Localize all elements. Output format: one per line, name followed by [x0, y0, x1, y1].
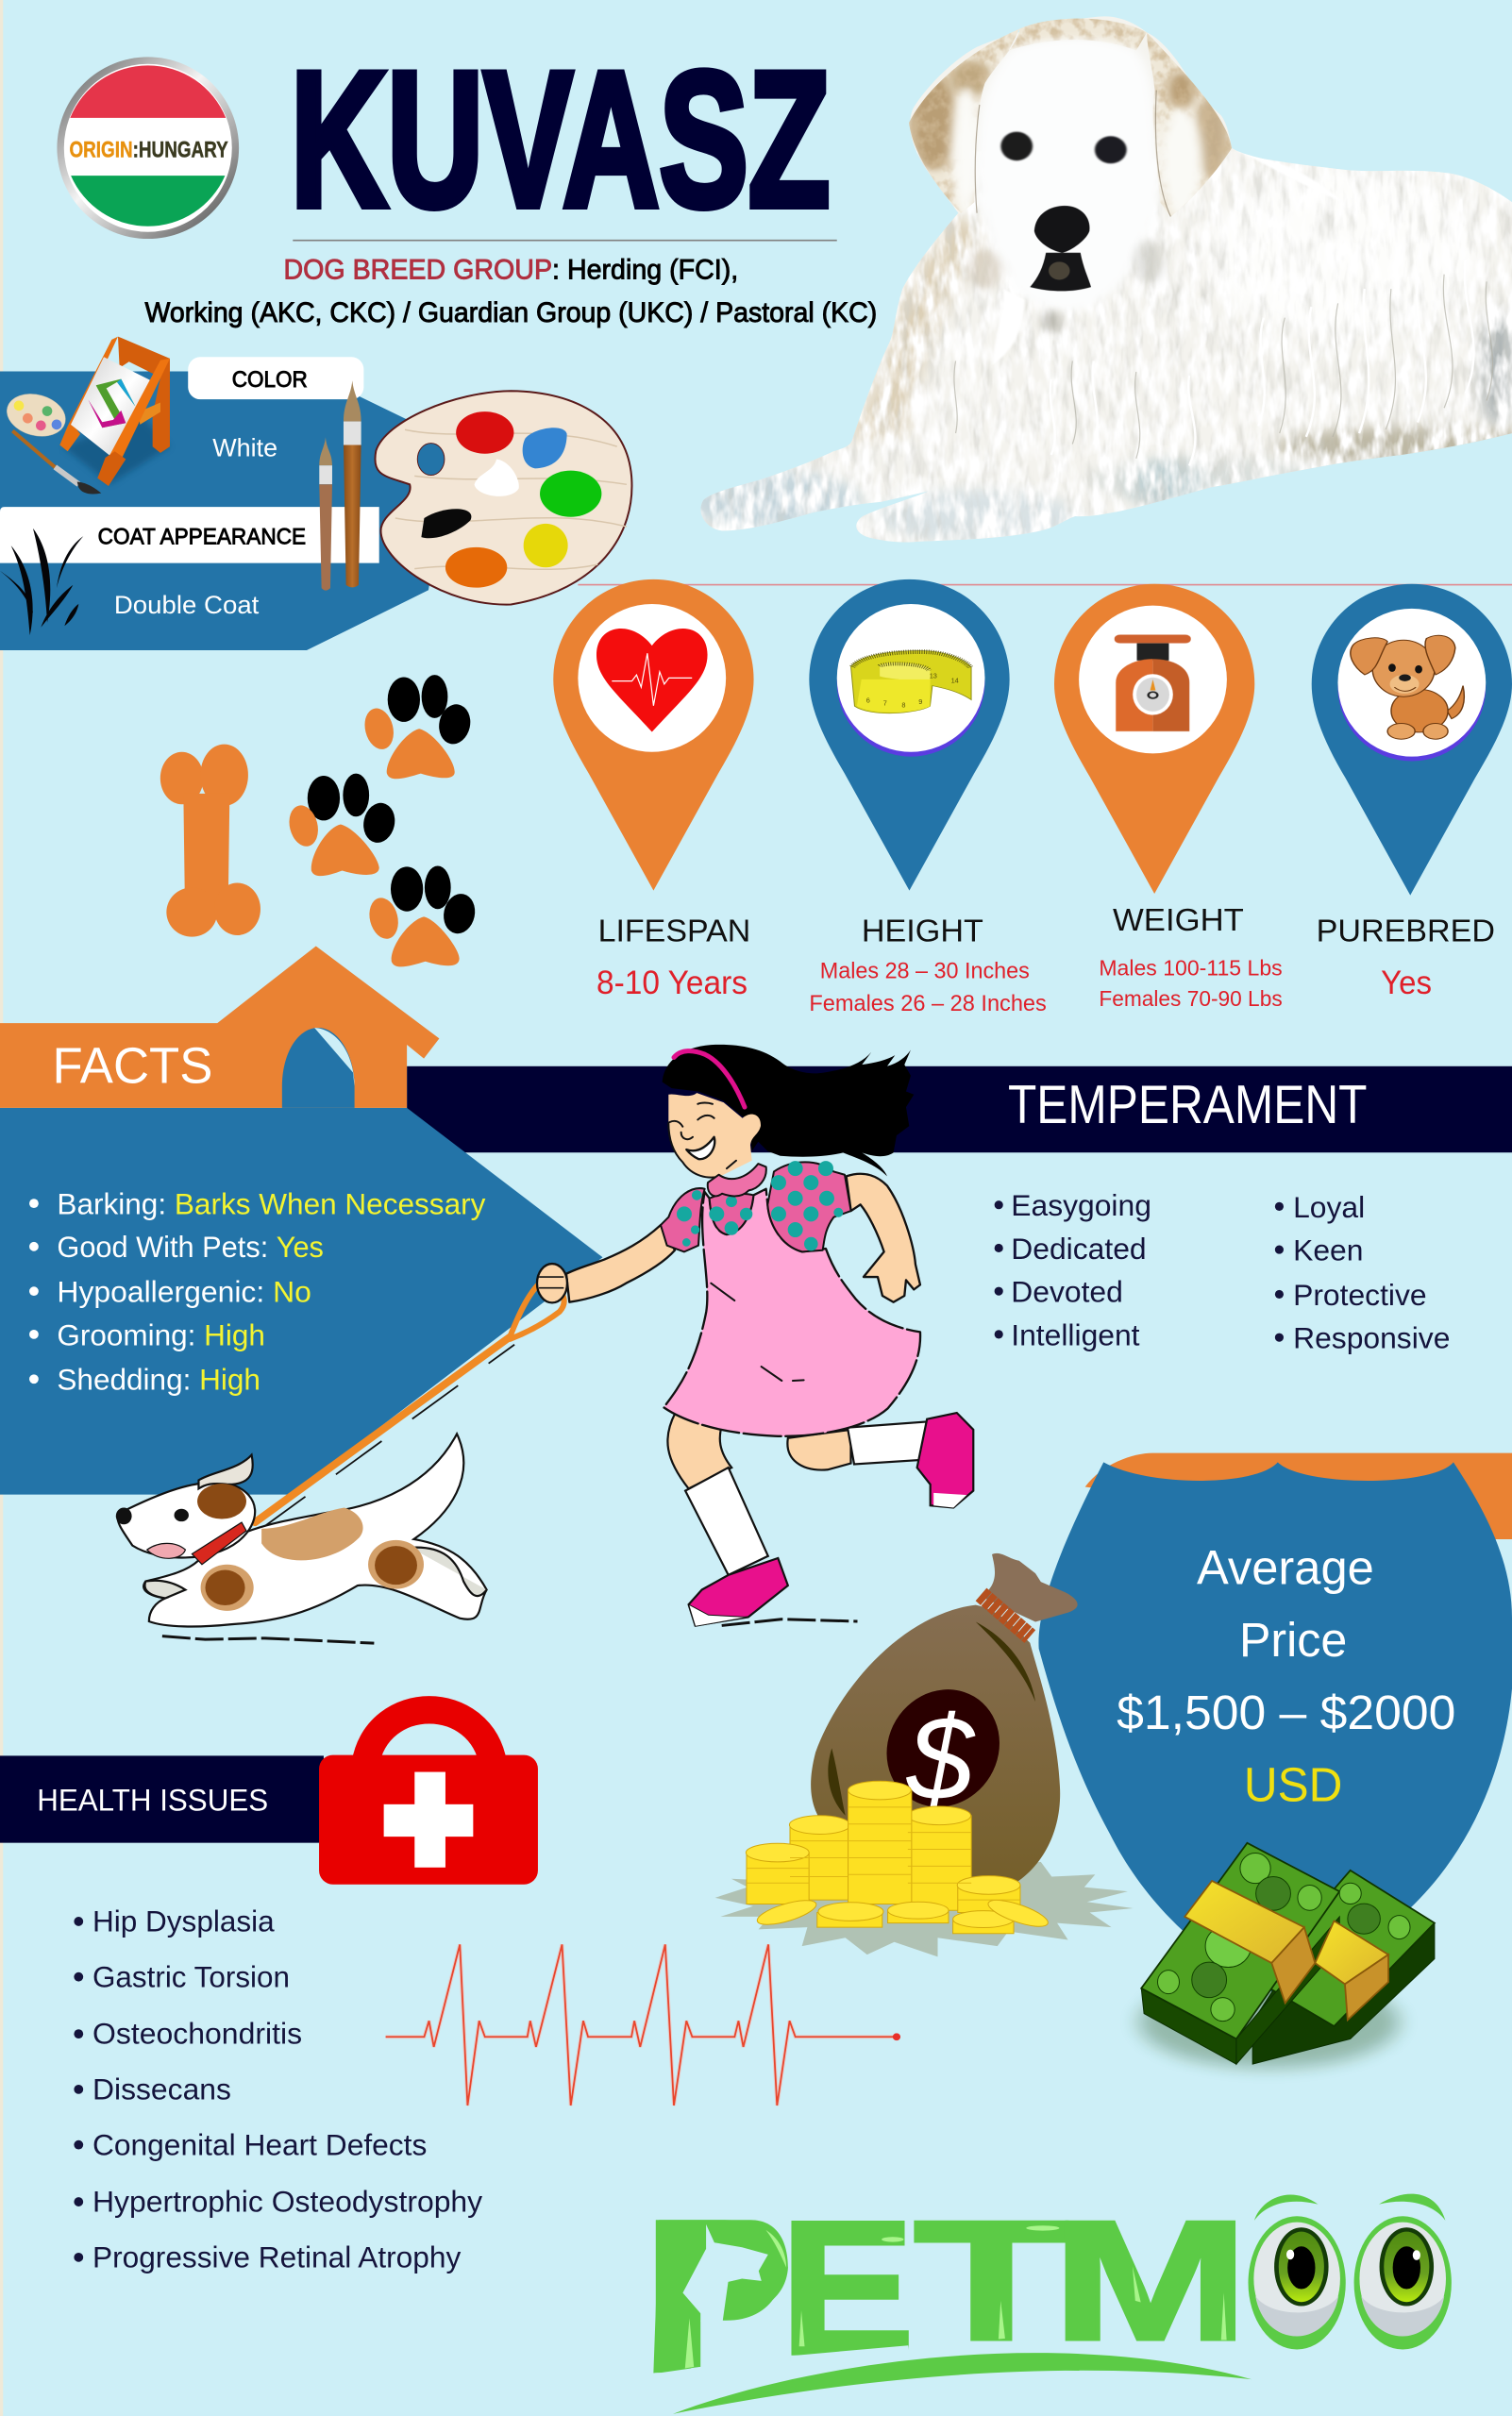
value: height: Males 28 – 30 Inches: [820, 960, 1030, 984]
text block: dog breed group: [145, 255, 877, 328]
icon: tape measure: 7: [883, 699, 887, 708]
dress: [664, 1189, 920, 1436]
value: weight: [1099, 955, 1283, 1011]
girl upper body: [537, 1045, 920, 1436]
icon: first aid kit: [319, 1710, 538, 1885]
logo letters: M: [1051, 2186, 1249, 2376]
logo shapes: [653, 2194, 1452, 2414]
label: weight: WEIGHT: [1113, 903, 1244, 938]
icon: grass: [0, 528, 83, 635]
text block: dog breed group: Working (AKC, CKC) / Guardian Group (UKC) / Pastoral (KC): [145, 297, 877, 328]
text block: facts list: [29, 1187, 485, 1397]
hair: [663, 1045, 914, 1176]
paw 1: [361, 675, 474, 779]
paw 2: [285, 774, 398, 876]
icon: tape measure: 6: [866, 696, 870, 704]
tag: coat appearance: COAT APPEARANCE: [98, 524, 306, 549]
text block: temperament list: Protective: [1293, 1278, 1427, 1312]
icon: tape measure: 13: [930, 671, 937, 680]
collar: [708, 1164, 766, 1196]
label: height: HEIGHT: [862, 914, 983, 949]
label: purebred: PUREBRED: [1317, 914, 1495, 949]
icon: tape measure: 14: [951, 676, 959, 684]
pin: weight: [1054, 584, 1254, 894]
burst: [715, 1862, 1134, 1956]
badge: origin Hungary flag: ORIGIN:HUNGARY: [69, 138, 228, 163]
text block: average price: USD: [1244, 1758, 1342, 1812]
divider under title: [293, 240, 837, 242]
text block: facts list: Grooming: High: [57, 1317, 265, 1351]
label: lifespan: LIFESPAN: [598, 914, 750, 949]
leash: [255, 1279, 564, 1522]
icon: cartoon puppy: [1351, 635, 1464, 739]
tag: color: COLOR: [232, 368, 308, 393]
logo letters: T: [914, 2185, 1069, 2375]
band: temperament header: [407, 1066, 1512, 1152]
text block: health issues list: Hypertrophic Osteodystrophy: [92, 2185, 482, 2219]
right leg: [787, 1430, 850, 1470]
eyes: [1000, 132, 1127, 163]
text block: health issues list: Progressive Retinal Atrophy: [92, 2240, 461, 2273]
title: KUVASZ: [291, 32, 830, 247]
text block: average price: [1117, 1540, 1455, 1812]
illustration: cash bundles: [1138, 1843, 1435, 2069]
logo: PETMOO: [644, 2176, 1452, 2416]
icon: tape measure: 9: [918, 697, 922, 706]
stats labels: [598, 903, 1495, 949]
paw 3: [365, 866, 479, 966]
icon: paint brushes: [319, 380, 361, 591]
value: height: [809, 960, 1047, 1016]
text block: temperament list: Keen: [1293, 1233, 1363, 1267]
left leg: [667, 1413, 731, 1488]
text block: dog breed group: DOG BREED GROUP: Herding (FCI),: [283, 255, 738, 286]
ears and head fringe: [909, 19, 1232, 216]
label oval: [877, 1684, 1009, 1813]
illustration: money bag and coins: [715, 1553, 1134, 1956]
text block: facts list: Good With Pets: Yes: [57, 1230, 324, 1264]
pin: lifespan: [553, 579, 754, 891]
sack: [811, 1605, 1060, 1888]
panel: price shield: [1038, 1462, 1512, 2003]
text block: health issues list: [74, 1904, 482, 2273]
pin: height: [809, 579, 1010, 891]
face: [977, 39, 1159, 310]
icon: bone: [160, 745, 260, 937]
text block: average price: Price: [1239, 1613, 1347, 1667]
icon: tape measure: 8: [901, 700, 905, 709]
small dog: [118, 1434, 487, 1626]
logo letters: P: [644, 2176, 787, 2416]
text: double coat: Double Coat: [114, 591, 260, 619]
text block: health issues list: Congenital Heart Defects: [92, 2127, 427, 2161]
panel: color and coat background: [0, 371, 431, 650]
icon: paint palette: [375, 391, 631, 605]
text block: temperament list: Intelligent: [1011, 1317, 1140, 1351]
logo letters: [644, 2176, 1249, 2416]
face: [668, 1093, 761, 1178]
pin: purebred: [1312, 584, 1512, 896]
text block: temperament list: Responsive: [1293, 1321, 1450, 1355]
value: lifespan: 8-10 Years: [596, 965, 748, 1001]
headband: [674, 1051, 745, 1107]
tag: color: [188, 357, 363, 399]
text block: temperament list: Devoted: [1011, 1275, 1123, 1309]
text block: temperament list: Easygoing: [1011, 1188, 1151, 1222]
text block: temperament list: Dedicated: [1011, 1232, 1147, 1266]
icon: paw prints: [285, 675, 479, 966]
badge: origin Hungary flag: [57, 57, 239, 239]
leash, small dog and girl's legs: [116, 1279, 973, 1643]
panel: price shield backing: [1085, 1453, 1512, 1539]
band: health issues: [0, 1755, 324, 1843]
icon: easel with palette: [2, 337, 170, 495]
text block: average price: $1,500 – $2000: [1117, 1686, 1455, 1739]
text block: health issues list: Hip Dysplasia: [92, 1904, 275, 1938]
value: weight: Females 70-90 Lbs: [1099, 986, 1283, 1011]
text block: health issues list: Gastric Torsion: [92, 1959, 290, 1993]
heading: temperament: TEMPERAMENT: [1008, 1075, 1367, 1135]
tag: coat appearance: [0, 507, 379, 563]
icon: tape measure: [851, 651, 971, 713]
text block: facts list: Barking: Barks When Necessary: [57, 1187, 485, 1221]
logo eyes: [1249, 2194, 1452, 2350]
text block: temperament list: [995, 1188, 1450, 1355]
neck ruff shading: [969, 240, 1163, 332]
text block: facts list: Shedding: High: [57, 1363, 260, 1397]
icon: coin stacks: [746, 1781, 1052, 1934]
divider line behind pins: [578, 584, 1512, 585]
text: dollar sign: $: [906, 1691, 976, 1825]
icon: kitchen scale: [1115, 635, 1191, 731]
panel: facts body: [0, 1108, 603, 1495]
text: white: White: [212, 433, 277, 461]
front arm: [566, 1225, 675, 1302]
text block: health issues list: Osteochondritis: [92, 2017, 302, 2051]
value: height: Females 26 – 28 Inches: [809, 992, 1047, 1016]
sleeves and bodice: [661, 1162, 851, 1251]
illustration: girl walking dog: [116, 1045, 973, 1643]
text block: health issues list: Dissecans: [92, 2072, 231, 2106]
heading: facts doghouse: FACTS: [53, 1038, 212, 1095]
logo swoosh: [673, 2353, 1252, 2414]
chart: heartbeat line: [386, 1944, 900, 2106]
icon: heart with pulse: [596, 629, 708, 732]
logo letters: E: [780, 2182, 915, 2394]
text block: facts list: Hypoallergenic: No: [57, 1275, 311, 1309]
value: purebred: Yes: [1381, 965, 1432, 1001]
heading: facts doghouse: [0, 946, 439, 1108]
rope: [982, 1594, 1030, 1636]
back arm: [847, 1174, 920, 1302]
text block: temperament list: Loyal: [1293, 1190, 1365, 1224]
value: weight: Males 100-115 Lbs: [1099, 955, 1283, 980]
nose and mouth: [1030, 206, 1091, 291]
text block: average price: Average: [1197, 1540, 1374, 1594]
photo: white kuvasz dog: [680, 0, 1512, 566]
heading: health issues: HEALTH ISSUES: [37, 1782, 268, 1817]
